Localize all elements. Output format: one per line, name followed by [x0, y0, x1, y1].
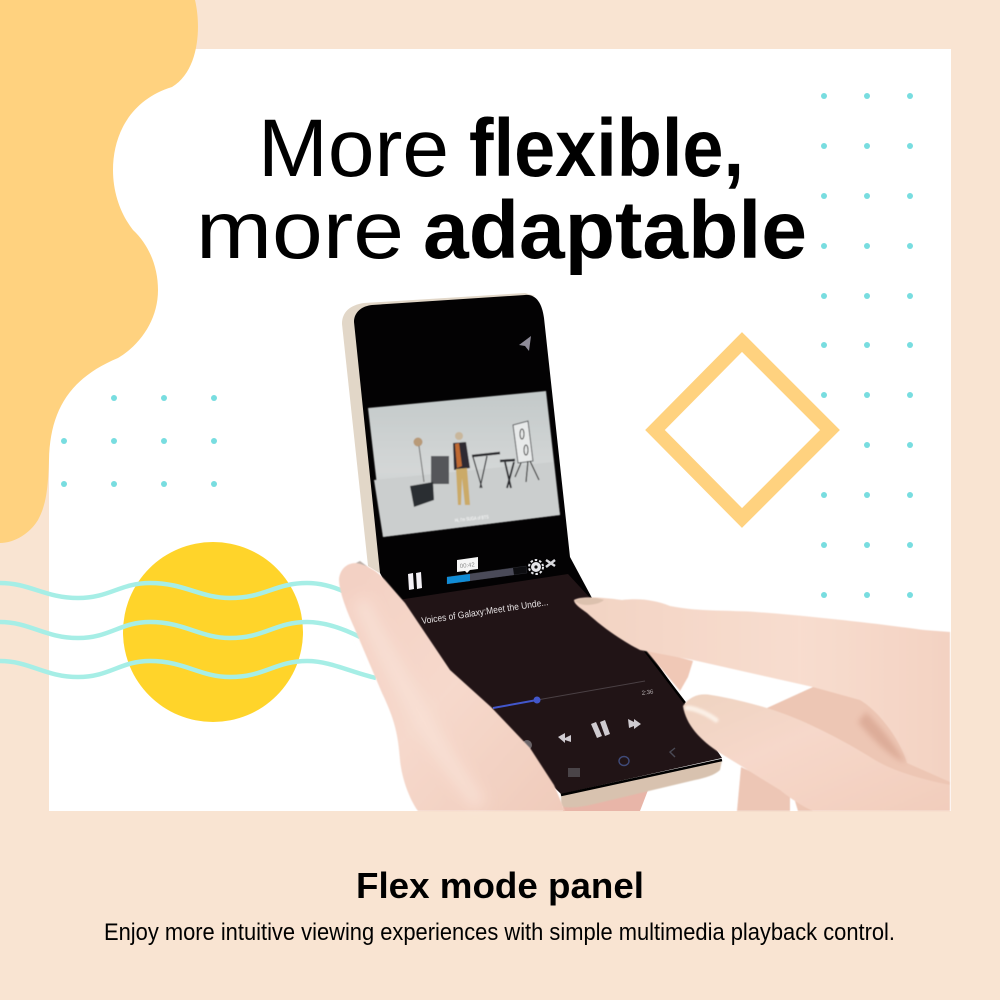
- video: seated person: [453, 432, 470, 505]
- middle finger: [644, 648, 693, 691]
- left hand: nail tip: [352, 561, 368, 567]
- media slider: 2:36: [641, 689, 654, 697]
- time tooltip: 00:42: [460, 562, 476, 570]
- finger under phone: [563, 785, 650, 811]
- icon: paper plane: [519, 336, 531, 351]
- diamond outline: [655, 342, 830, 518]
- playback controls: [522, 719, 641, 750]
- thumb nail highlight: [687, 708, 716, 720]
- caption heading: Flex mode panel: [356, 865, 644, 906]
- finger below thumb: [737, 767, 790, 811]
- title: More: [258, 103, 449, 194]
- index finger and back of hand: [574, 597, 950, 782]
- teal wavy lines: [0, 583, 376, 678]
- phone: upper screen: [354, 295, 592, 612]
- phone: lower screen: [398, 574, 722, 794]
- yellow circle: [123, 542, 303, 722]
- video frame: [368, 391, 560, 537]
- palm behind thumb: [767, 687, 950, 811]
- icon: settings gear: [529, 560, 543, 574]
- right hand: [574, 597, 950, 811]
- video: whiteboard: [513, 421, 539, 482]
- time tooltip: [457, 557, 478, 573]
- index fingernail: [574, 598, 604, 605]
- caption description: Enjoy more intuitive viewing experiences with simple multimedia playback control.: [104, 919, 895, 946]
- phone: lower body edge: [561, 760, 722, 807]
- video: floor: [374, 462, 560, 537]
- left hand: highlight: [360, 600, 480, 805]
- foldable phone and hands: [339, 293, 950, 811]
- white panel: [49, 49, 951, 811]
- video: lamp: [414, 438, 424, 482]
- left hand: [339, 561, 565, 811]
- title: [196, 103, 807, 276]
- title: flexible,: [469, 103, 744, 194]
- video: subtitle: Hi, I'm SUGA of BTS: [455, 514, 490, 524]
- icon: shuffle: [546, 560, 555, 567]
- video: keyboards and stands: [472, 453, 515, 488]
- palm crease shadow: [858, 712, 906, 763]
- dot grid: right: [821, 93, 913, 598]
- thumb: [683, 694, 950, 811]
- phone: edge lines: [561, 648, 722, 795]
- panel title text: Voices of Galaxy:Meet the Unde...: [421, 597, 549, 627]
- progress bar: [447, 566, 527, 584]
- title: adaptable: [423, 185, 807, 276]
- dot grid: left: [61, 395, 217, 487]
- phone: upper frame: [342, 293, 535, 574]
- navigation buttons: [568, 748, 675, 777]
- orange blob shape: [0, 0, 198, 543]
- icon: pause button: [408, 572, 422, 590]
- video: amplifiers: [410, 456, 449, 507]
- title: more: [196, 185, 404, 276]
- media slider: [493, 681, 654, 708]
